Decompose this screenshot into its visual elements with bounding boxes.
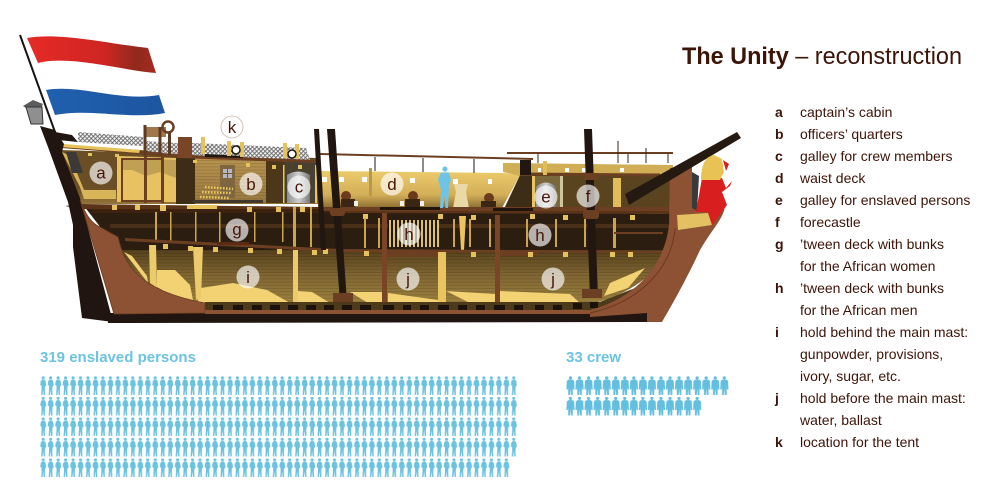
stern top block [55, 132, 78, 142]
legend k: location for the tent [800, 434, 919, 450]
blue human figure for scale [438, 166, 451, 208]
heading: 319 enslaved persons: 319 enslaved persons [40, 349, 196, 366]
label f: f [586, 187, 591, 206]
beakhead timber [677, 213, 712, 230]
masts [314, 129, 602, 302]
label h aft: h [404, 225, 414, 244]
label e: e [541, 188, 551, 206]
bowsprit [625, 132, 741, 205]
legend a: a [775, 104, 783, 120]
poop deck mesh railing [78, 132, 143, 146]
legend e: e [775, 192, 783, 208]
galley vessel for crew [287, 172, 310, 203]
lower deck beams [125, 238, 668, 257]
aft upper cabins [60, 150, 318, 204]
waist deck bulwark [318, 171, 520, 208]
bunk bars in the men's section [388, 220, 438, 247]
legend b: officers’ quarters [800, 126, 903, 142]
label g [226, 218, 248, 242]
stern post (black) [40, 126, 113, 322]
legend h: h [775, 280, 784, 296]
lit yellow room [118, 156, 176, 202]
label i: i [246, 268, 250, 287]
legend j: hold before the main mast: [800, 390, 966, 406]
bow brown hull [205, 166, 725, 322]
heading: 33 crew: 33 crew [566, 349, 621, 366]
legend h [775, 280, 944, 318]
legend c: galley for crew members [800, 148, 952, 164]
poop deck timber [48, 144, 318, 163]
portholes [232, 146, 240, 154]
label i [236, 266, 260, 288]
bunk pegs [200, 187, 233, 198]
label j aft: j [405, 270, 410, 289]
forecastle [502, 141, 673, 213]
hold floor lit areas [124, 252, 645, 304]
label c: c [295, 178, 304, 196]
label j fore [542, 268, 564, 290]
cannons [341, 191, 496, 208]
label a [90, 162, 112, 184]
label j aft [396, 268, 420, 290]
legend [774, 104, 970, 450]
legend a: captain’s cabin [800, 104, 892, 120]
figurehead: lion [692, 155, 732, 225]
legend j [774, 390, 966, 428]
label h fore [528, 224, 552, 246]
legend g: for the African women [800, 258, 935, 274]
legend i: i [775, 324, 779, 340]
legend e: galley for enslaved persons [800, 192, 970, 208]
label g: g [232, 220, 242, 239]
title: The Unity – reconstruction [682, 43, 962, 70]
hold bulkheads [149, 213, 500, 304]
flag: Dutch tricolour [27, 36, 165, 115]
door [220, 165, 235, 198]
handrail over waist [320, 154, 533, 159]
ship cross-section [20, 35, 741, 323]
label k [221, 116, 243, 138]
label c [288, 176, 310, 198]
'tween deck posts [155, 207, 616, 249]
legend f: f [775, 214, 780, 230]
label d [380, 172, 404, 196]
pictogram: enslaved persons [40, 376, 518, 478]
stern hull wedge yellow [62, 152, 116, 199]
legend j: water, ballast [799, 412, 882, 428]
hull interior: hold [118, 244, 668, 306]
legend d: d [775, 170, 784, 186]
label f [576, 184, 600, 208]
legend g [775, 236, 944, 274]
legend f: forecastle [800, 214, 861, 230]
legend h: for the African men [800, 302, 918, 318]
stern brown hull [80, 200, 205, 314]
legend g: g [775, 236, 784, 252]
legend i [775, 324, 968, 384]
dark corridor [176, 158, 195, 204]
legend i: hold behind the main mast: [800, 324, 968, 340]
officers' quarters wall [195, 158, 266, 202]
label e [534, 186, 558, 208]
label b [240, 172, 262, 196]
lantern [23, 100, 43, 124]
legend j: j [774, 390, 779, 406]
legend b: b [775, 126, 784, 142]
legend g: ’tween deck with bunks [800, 236, 944, 252]
legend i: ivory, sugar, etc. [800, 368, 901, 384]
label a: a [96, 164, 106, 182]
keel floor frames [205, 286, 645, 311]
capstan [453, 184, 469, 250]
label d: d [387, 175, 397, 194]
'tween deck [84, 206, 672, 250]
label k: k [228, 118, 237, 137]
legend h: ’tween deck with bunks [800, 280, 944, 296]
flagpole [20, 35, 55, 132]
label h fore: h [535, 226, 545, 245]
winch on deck [144, 122, 192, 158]
legend i: gunpowder, provisions, [800, 346, 943, 362]
legend k: k [775, 434, 783, 450]
legend c: c [775, 148, 783, 164]
label circles [90, 116, 600, 290]
pictogram: crew [566, 376, 729, 417]
stern window [66, 152, 83, 173]
main deck beams [65, 204, 670, 220]
legend d: waist deck [799, 170, 866, 186]
label h aft [398, 222, 420, 246]
label j fore: j [550, 270, 555, 289]
label b: b [246, 175, 256, 194]
